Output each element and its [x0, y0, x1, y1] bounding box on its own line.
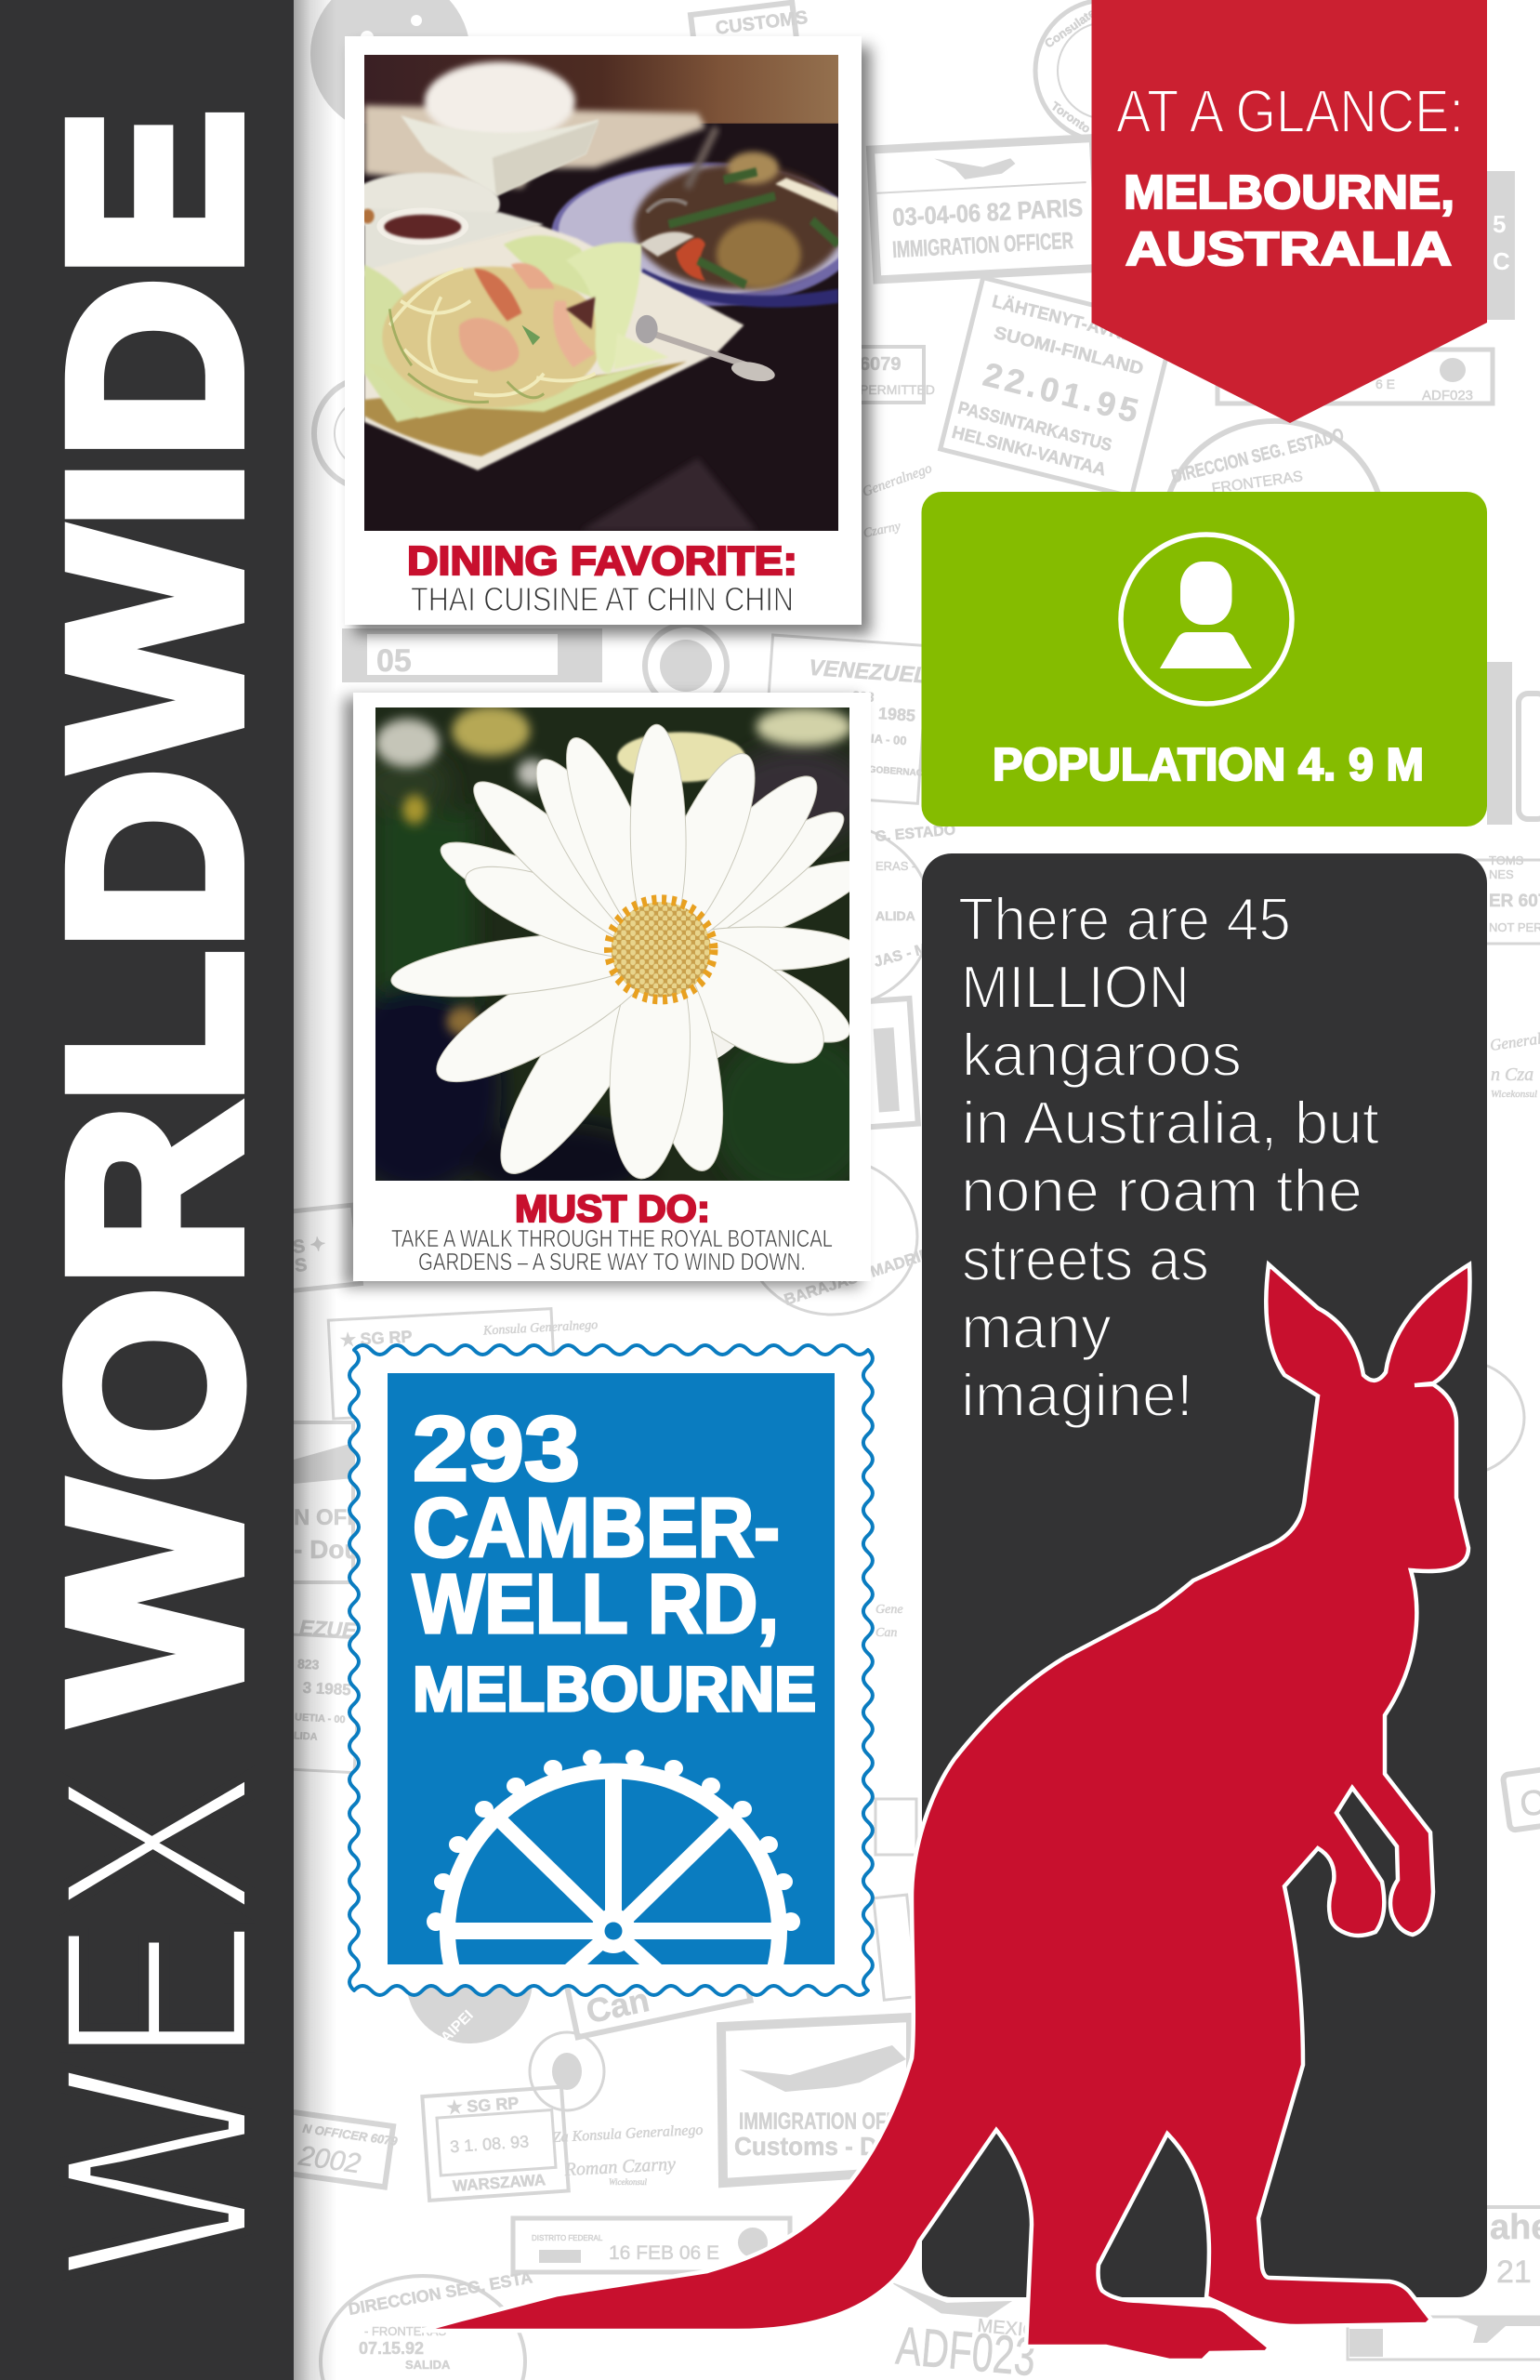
stamp: ADF023 top right: 6 E — [1375, 377, 1395, 391]
stamp: Direccion oval top — [1151, 407, 1396, 643]
stamp: bottom right: 21 — [1496, 2254, 1532, 2290]
stamp: Za Konsula text: Wicekonsul — [609, 2177, 647, 2187]
stamp: Za Konsula text: Roman Czarny — [563, 2154, 677, 2180]
stamp: Finland — [941, 278, 1174, 496]
caption: dining favorite: THAI CUISINE AT CHIN CHIN — [411, 580, 794, 618]
stamp: Generalnego right of photo one: Generalnego — [861, 461, 934, 500]
stamp: Direccion oval middle: ERAS - — [875, 859, 915, 873]
stamp: Finland: LÄHTENYT-AVREST — [990, 292, 1157, 351]
stamp: customs right — [1450, 853, 1540, 944]
stamp: Generalnego right of photo one: Czarny — [862, 520, 902, 541]
stamp: Venezuela left: 3 1985 — [302, 1679, 351, 1699]
stamp: Venezuela: GOBERNACION — [868, 765, 940, 780]
stamp: Venezuela: 823 — [852, 688, 875, 705]
stamp: customs right: NES — [1489, 867, 1514, 881]
stamp: bottom right — [1348, 2205, 1540, 2360]
banner: at a glance: MELBOURNE, — [1124, 165, 1454, 218]
stamp: customs top — [691, 1, 811, 61]
stamp: Venezuela left: LIDA — [294, 1730, 318, 1743]
stamp: SG RP top — [328, 1306, 602, 1419]
fact text: MILLION — [961, 953, 1190, 1021]
banner: at a glance — [1091, 0, 1487, 423]
stamp: immigration customs — [721, 2017, 911, 2183]
stamp: Generalny right of postage stamp: Can — [875, 1626, 897, 1640]
stamp: Barajas oval: BARAJAS - MADRID — [782, 1245, 933, 1309]
stamp: Paris immigration — [870, 139, 1099, 280]
illustration: red kangaroo — [420, 1264, 1469, 2360]
fact text: many — [961, 1293, 1112, 1361]
stamp: block between photo and panel — [856, 998, 918, 1128]
photo: Thai food — [364, 55, 838, 531]
stamp: Taipei solid: TAIPEI — [432, 2007, 477, 2052]
fact text — [958, 885, 1379, 1429]
stamp: rect right C — [1503, 1767, 1540, 1831]
stamp: Taipei solid — [406, 1917, 533, 2052]
stamp: Direccion oval bottom: - FRONTERAS — [364, 2324, 446, 2338]
stamp: 16 Feb: DISTRITO FEDERAL — [532, 2234, 603, 2242]
fact text: none roam the — [961, 1157, 1362, 1224]
panel: kangaroo fact — [922, 853, 1487, 2297]
stamp: SG RP top: ★ SG RP — [340, 1328, 413, 1350]
stamp: Paris immigration: IMMIGRATION OFFICER — [891, 228, 1074, 263]
panel: population — [922, 492, 1487, 826]
stamp: under first photo — [342, 628, 602, 682]
stamp: ADF023 Mexico bottom: MEXIC — [977, 2316, 1037, 2341]
stamp: Generalnego right of photo one — [861, 461, 934, 541]
address text — [413, 1397, 816, 1725]
stamp: customs right: TOMS — [1489, 853, 1524, 867]
stamp: officer 2002 — [276, 2111, 400, 2188]
stamp: Direccion oval top: FRONTERAS — [1211, 469, 1304, 497]
photo: white daisy — [375, 707, 849, 1181]
address text: CAMBER- — [413, 1482, 780, 1575]
stamp: officer douane left — [279, 1422, 383, 1582]
stamp: Direccion oval bottom: SALIDA — [405, 2358, 451, 2372]
stamp: Venezuela left: UETIA - 00 — [295, 1712, 346, 1726]
caption: must do: MUST DO: — [515, 1187, 710, 1230]
stamp: Paris immigration: 03-04-06 82 PARIS — [892, 193, 1084, 231]
stamp: Venezuela: VENEZUELA — [808, 655, 944, 690]
shadow beside title bar — [294, 0, 336, 2380]
fact text: imagine! — [961, 1361, 1193, 1429]
icon: Melbourne Star wheel — [427, 1750, 800, 1964]
stamp: block right of banner: C — [1493, 247, 1510, 275]
stamp: Direccion oval bottom: 07.15.92 — [359, 2339, 424, 2358]
stamp: officer 2002: 2002 — [296, 2140, 362, 2179]
polaroid: must do — [331, 693, 875, 1287]
stamp: round left — [314, 377, 426, 489]
stamp: ADF023 top right — [1218, 350, 1493, 403]
population figure: POPULATION 4. 9 M — [993, 740, 1424, 790]
fact text: kangaroos — [962, 1021, 1242, 1089]
stamp: Za Konsula text: Za Konsula Generalnego — [552, 2122, 704, 2146]
stamp: Polish seal — [530, 2032, 604, 2110]
title: WEX WORLDWIDE: WEX — [6, 1769, 307, 2277]
stamp: Barajas oval — [746, 1158, 933, 1315]
caption: must do: TAKE A WALK THROUGH THE ROYAL BOTANICAL — [391, 1224, 833, 1252]
stamp: Warszawa — [422, 2087, 569, 2201]
fact text: There are 45 — [958, 885, 1291, 953]
stamp: Direccion oval middle: ALIDA — [875, 908, 915, 923]
stamp: Venezuela left: EZUEL — [298, 1615, 370, 1643]
fact text: streets as — [962, 1225, 1209, 1293]
stamp: Generalny right of postage stamp: Gene — [875, 1603, 903, 1617]
caption: must do — [391, 1187, 833, 1276]
stamp: Generalny right — [1489, 1027, 1540, 1100]
stamp: maple leaf left: S ✦ — [292, 1234, 327, 1258]
icon: person — [1121, 535, 1292, 704]
stamp: round consulate top — [1035, 0, 1177, 141]
postage stamp: address — [348, 1343, 875, 1997]
stamp: blocks right margin — [1487, 662, 1540, 825]
stamp: Direccion oval bottom — [321, 2268, 533, 2380]
caption: must do: GARDENS – A SURE WAY TO WIND DOWN. — [418, 1248, 806, 1276]
stamp: customs top: CUSTOMS — [715, 7, 809, 39]
stamp: Canada tilted — [564, 1935, 750, 2037]
address text: WELL RD, — [413, 1558, 779, 1651]
stamp: Warszawa: ★ SG RP — [447, 2094, 520, 2117]
stamp: round consular center — [645, 625, 727, 707]
stamp: Warszawa: 3 1. 08. 93 — [449, 2132, 530, 2156]
address text: 293 — [413, 1397, 580, 1500]
stamp: Direccion oval middle: G. ESTADO — [875, 822, 956, 845]
stamp: officer 2002: N OFFICER 6079 — [302, 2122, 399, 2149]
stamp: Venezuela — [762, 635, 948, 805]
stamp: immigration customs: Customs - Do — [734, 2132, 892, 2161]
stamp: ADF023 Mexico bottom — [880, 2281, 1041, 2380]
caption: dining favorite: DINING FAVORITE: — [407, 538, 797, 584]
stamp: Direccion oval middle: JAS - M — [873, 941, 929, 971]
stamp: oval right — [1394, 1360, 1524, 1475]
stamp: officer douane left: N OFFIC — [294, 1505, 383, 1530]
stamp: Direccion oval bottom: DIRECCION SEG. ESTA — [347, 2268, 533, 2319]
stamp: 16 Feb — [513, 2218, 790, 2272]
banner: at a glance: AUSTRALIA — [1125, 222, 1452, 275]
stamp: 16 Feb: 16 FEB 06 E — [609, 2242, 719, 2264]
stamp: maple leaf left: S — [294, 1255, 309, 1276]
stamp: Generalny right of postage stamp — [874, 1603, 917, 2000]
stamp: Venezuela: IA - 00 — [871, 732, 907, 747]
stamp: Venezuela left: 823 — [297, 1656, 320, 1673]
stamp: Direccion oval middle — [723, 822, 956, 1009]
stamp: Venezuela: 1985 — [877, 704, 916, 725]
stamp perforated border — [349, 1345, 873, 1995]
stamp: Za Konsula text — [552, 2122, 704, 2187]
stamp: under first photo: 05 — [376, 643, 412, 679]
polaroid: dining favorite — [345, 36, 871, 635]
stamp: Venezuela left — [257, 1613, 370, 1773]
stamp: Finland: PASSINTARKASTUS — [955, 399, 1113, 456]
fact text: in Australia, but — [962, 1089, 1379, 1157]
stamp: Finland: SUOMI-FINLAND — [992, 324, 1145, 379]
caption: dining favorite — [407, 538, 797, 618]
stamp: maple leaf left — [265, 1205, 361, 1293]
stamp: permitted — [846, 347, 935, 403]
stamp: Canada tilted: Can — [583, 1980, 652, 2030]
stamp: Generalny right: Wicekonsul — [1491, 1089, 1537, 1100]
stamp: round consulate top: Toronto — [1048, 99, 1093, 136]
title: WEX WORLDWIDE — [6, 109, 307, 2277]
stamp: Finland: HELSINKI-VANTAA — [950, 423, 1108, 480]
banner: at a glance: AT A GLANCE: — [1116, 77, 1464, 145]
stamp: ADF023 top right: ADF023 — [1422, 388, 1473, 403]
stamp: permitted: PERMITTED — [860, 382, 935, 397]
stamp: Finland: 22.01.95 — [980, 355, 1142, 430]
stamp: officer douane left: - Dou — [294, 1535, 361, 1564]
stamp: round consulate top: Consulate — [1042, 6, 1098, 50]
address text: MELBOURNE — [413, 1654, 816, 1725]
stamp: Generalny right: n Cza — [1491, 1064, 1533, 1085]
stamp: permitted: 6079 — [860, 354, 902, 375]
stamp: Warszawa: WARSZAWA — [452, 2171, 546, 2195]
title: WEX WORLDWIDE: WORLDWIDE — [19, 109, 290, 1722]
stamp: Direccion oval top: DIRECCION SEG. ESTADO — [1170, 425, 1346, 487]
stamp: block right of banner: 5 — [1493, 210, 1506, 238]
stamp: block right of banner — [1487, 171, 1515, 320]
stamp: SG RP top: Konsula Generalnego — [482, 1318, 599, 1339]
title bar — [0, 0, 307, 2380]
stamp: immigration customs: IMMIGRATION OFF — [739, 2109, 897, 2135]
stamp: solid round top left — [310, 0, 470, 134]
